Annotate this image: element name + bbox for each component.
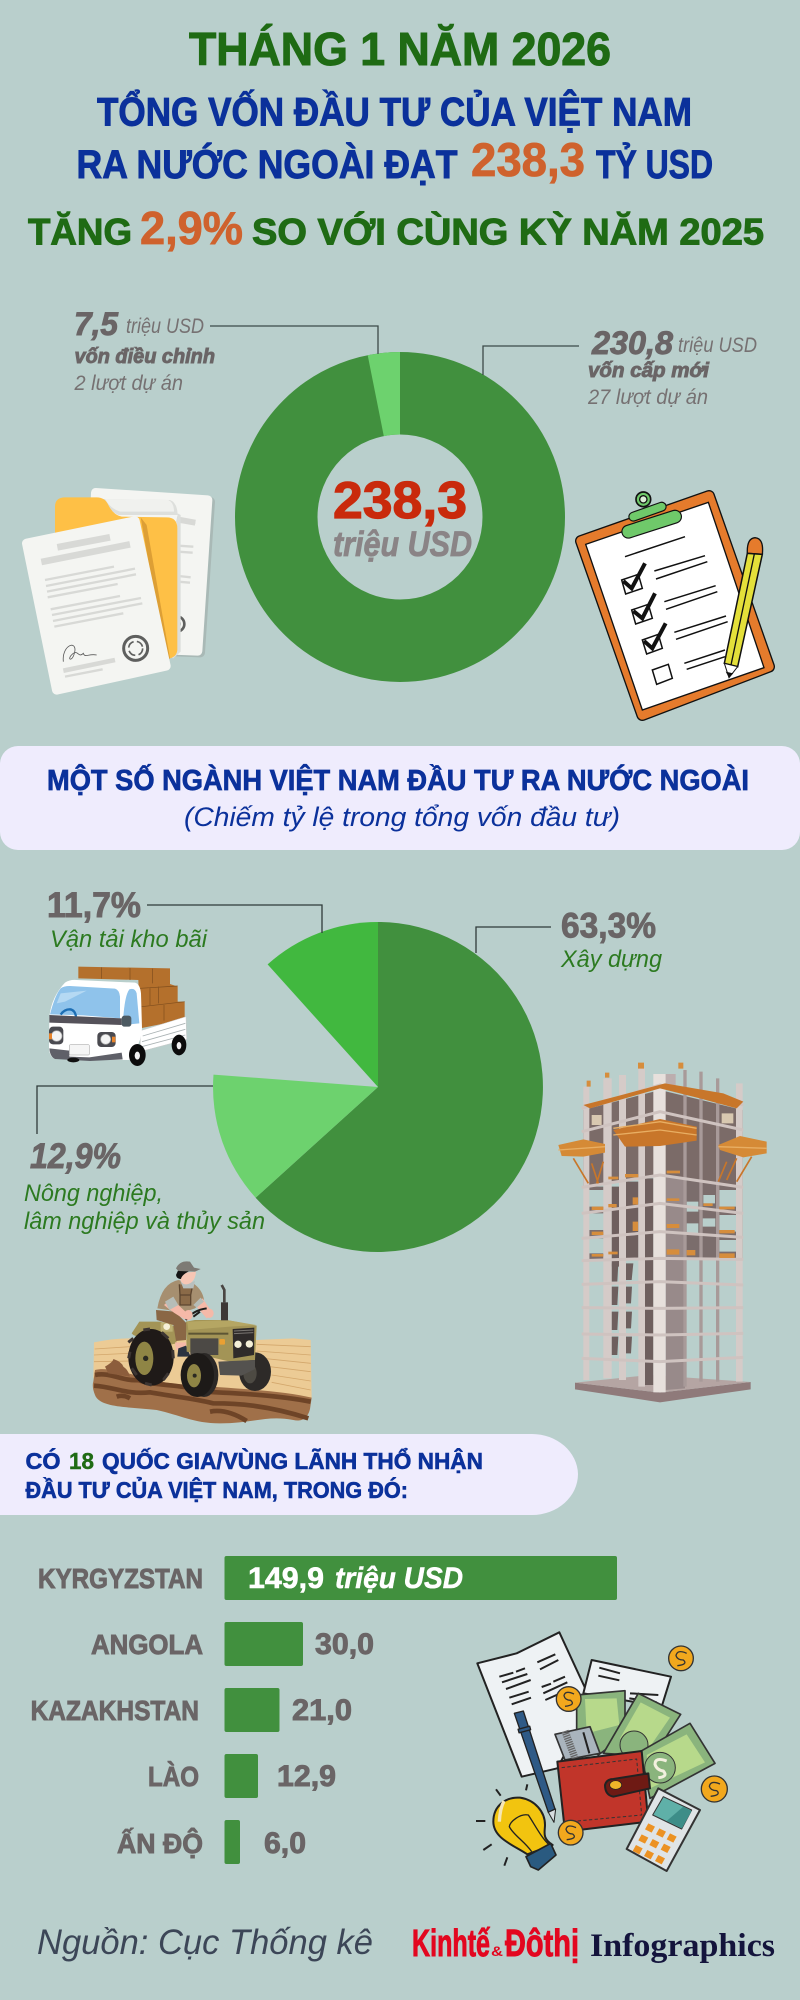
title line: growth: SO VỚI CÙNG KỲ NĂM 2025 xyxy=(252,210,764,252)
icon: building under construction xyxy=(558,1063,767,1402)
pie slice: construction 63.3% xyxy=(256,922,543,1252)
heading line: 18 countries: 18 xyxy=(69,1448,94,1474)
icon: finance wallet, money, calculator and bulb xyxy=(476,1632,727,1871)
bar row: Angola: 30,0 xyxy=(315,1628,374,1661)
pie chart: sectors xyxy=(213,922,543,1252)
icon: documents and folder xyxy=(27,493,210,690)
panel: sectors heading banner xyxy=(0,746,800,850)
bar row: Kyrgyzstan xyxy=(38,1556,617,1600)
heading line: receive investment: ĐẦU TƯ CỦA VIỆT NAM, TRONG ĐÓ: xyxy=(26,1475,408,1503)
bar row: Laos xyxy=(148,1754,336,1798)
logo: Kinh te & Do thi Infographics: & xyxy=(491,1943,503,1959)
bar row: Kyrgyzstan: triệu USD xyxy=(335,1562,463,1595)
callout: new capital xyxy=(483,325,757,409)
callout: agriculture: 12,9% xyxy=(30,1137,121,1176)
bar row: India: ẤN ĐỘ xyxy=(117,1827,203,1859)
bar row: Laos: 12,9 xyxy=(277,1760,336,1793)
title line: growth xyxy=(28,202,764,254)
bar row: India xyxy=(117,1820,306,1864)
callout: agriculture: lâm nghiệp và thủy sản xyxy=(24,1208,265,1235)
donut centre value: 238,3 xyxy=(333,472,467,530)
icon: delivery truck xyxy=(49,967,187,1066)
callout: new capital: 230,8 xyxy=(591,325,673,361)
callout: adjusted capital: 2 lượt dự án xyxy=(74,372,183,395)
callout: adjusted capital: triệu USD xyxy=(126,315,204,338)
bar row: Kazakhstan xyxy=(31,1688,352,1732)
panel: countries heading banner xyxy=(0,1434,578,1515)
source note: Nguồn: Cục Thống kê xyxy=(37,1923,373,1962)
bar row: Kyrgyzstan: 149,9 xyxy=(248,1562,324,1595)
icon: farmer on tractor xyxy=(93,1261,312,1423)
callout: adjusted capital: 7,5 xyxy=(74,306,119,342)
title line: growth: TĂNG xyxy=(28,212,132,252)
callout: construction xyxy=(476,906,663,973)
heading line: 18 countries: CÓ xyxy=(26,1447,60,1474)
bar row: Angola xyxy=(91,1622,374,1666)
callout: agriculture xyxy=(24,1086,265,1235)
title line: growth: 2,9% xyxy=(140,202,243,254)
donut segment: adjusted capital xyxy=(368,352,400,436)
bar row: Kyrgyzstan: KYRGYZSTAN xyxy=(38,1563,203,1594)
title line: abroad reaches: TỶ USD xyxy=(596,143,713,187)
title line: month: THÁNG 1 NĂM 2026 xyxy=(189,23,611,75)
bar row: India: 6,0 xyxy=(264,1827,306,1860)
callout: construction: Xây dựng xyxy=(560,946,663,973)
logo: Kinh te & Do thi Infographics xyxy=(412,1923,775,1965)
logo: Kinh te & Do thi Infographics: Infographics xyxy=(590,1928,775,1964)
callout: transport: 11,7% xyxy=(47,886,141,925)
bar row: Angola: ANGOLA xyxy=(91,1629,203,1660)
logo: Kinh te & Do thi Infographics: Kinhtế xyxy=(412,1923,491,1965)
callout: new capital: vốn cấp mới xyxy=(588,360,709,382)
bar row: Laos: LÀO xyxy=(148,1761,199,1792)
donut chart: total capital xyxy=(276,352,524,641)
heading line: 18 countries: QUỐC GIA/VÙNG LÃNH THỔ NHẬN xyxy=(102,1447,483,1474)
subheading: share of total: (Chiếm tỷ lệ trong tổng vốn đầu tư) xyxy=(184,802,620,832)
title line: abroad reaches: RA NƯỚC NGOÀI ĐẠT xyxy=(76,143,458,187)
callout: transport xyxy=(47,886,322,953)
bar row: Kazakhstan: 21,0 xyxy=(292,1694,352,1727)
title line: abroad reaches xyxy=(76,133,713,187)
callout: transport: Vận tải kho bãi xyxy=(50,926,208,953)
callout: construction: 63,3% xyxy=(561,906,656,946)
donut segment: new capital xyxy=(276,393,524,641)
logo: Kinh te & Do thi Infographics: Đôthị xyxy=(505,1923,579,1965)
bar row: Kazakhstan: KAZAKHSTAN xyxy=(31,1695,199,1726)
icon: clipboard with checklist and pencil xyxy=(581,492,769,715)
pie slice: agriculture 12.9% xyxy=(213,1075,378,1198)
callout: adjusted capital: vốn điều chỉnh xyxy=(74,346,215,368)
heading: sectors: MỘT SỐ NGÀNH VIỆT NAM ĐẦU TƯ RA NƯỚC NGOÀI xyxy=(47,763,749,797)
title xyxy=(28,23,764,254)
pie slice: transport 11.7% xyxy=(268,922,378,1087)
donut centre unit: triệu USD xyxy=(333,525,472,564)
callout: adjusted capital xyxy=(74,306,378,395)
callout: new capital: triệu USD xyxy=(678,334,757,357)
callout: agriculture: Nông nghiệp, xyxy=(24,1180,163,1207)
title line: total investment: TỔNG VỐN ĐẦU TƯ CỦA VIỆT NAM xyxy=(97,90,692,134)
title line: abroad reaches: 238,3 xyxy=(471,133,585,186)
bar chart: top recipient countries xyxy=(31,1556,617,1864)
callout: new capital: 27 lượt dự án xyxy=(587,386,708,409)
